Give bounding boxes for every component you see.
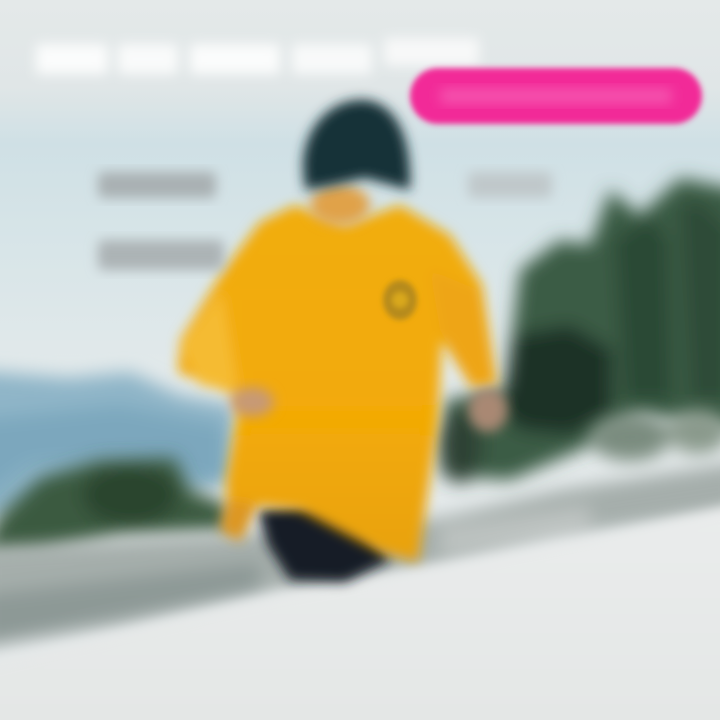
- road surface: [0, 502, 720, 720]
- title (blurred, illegible): [36, 38, 479, 74]
- left label 2: [98, 240, 224, 270]
- left label 1: [98, 172, 216, 198]
- runner yellow shirt: [178, 205, 497, 562]
- chest badge: [383, 280, 417, 320]
- pink pill button: [410, 68, 702, 124]
- pill text (blurred, illegible): [440, 88, 672, 104]
- left hand: [230, 387, 274, 417]
- beanie head: [303, 100, 410, 190]
- right hand: [468, 388, 508, 432]
- roadside bushes right: [590, 410, 720, 461]
- runner legs: [258, 500, 390, 582]
- runner: [178, 100, 508, 582]
- left foreground trees: [0, 458, 235, 555]
- guard wall: [0, 462, 720, 648]
- distant blue mountains: [0, 370, 235, 520]
- right label: [468, 172, 552, 198]
- right forest: [438, 178, 720, 483]
- neck: [310, 185, 370, 225]
